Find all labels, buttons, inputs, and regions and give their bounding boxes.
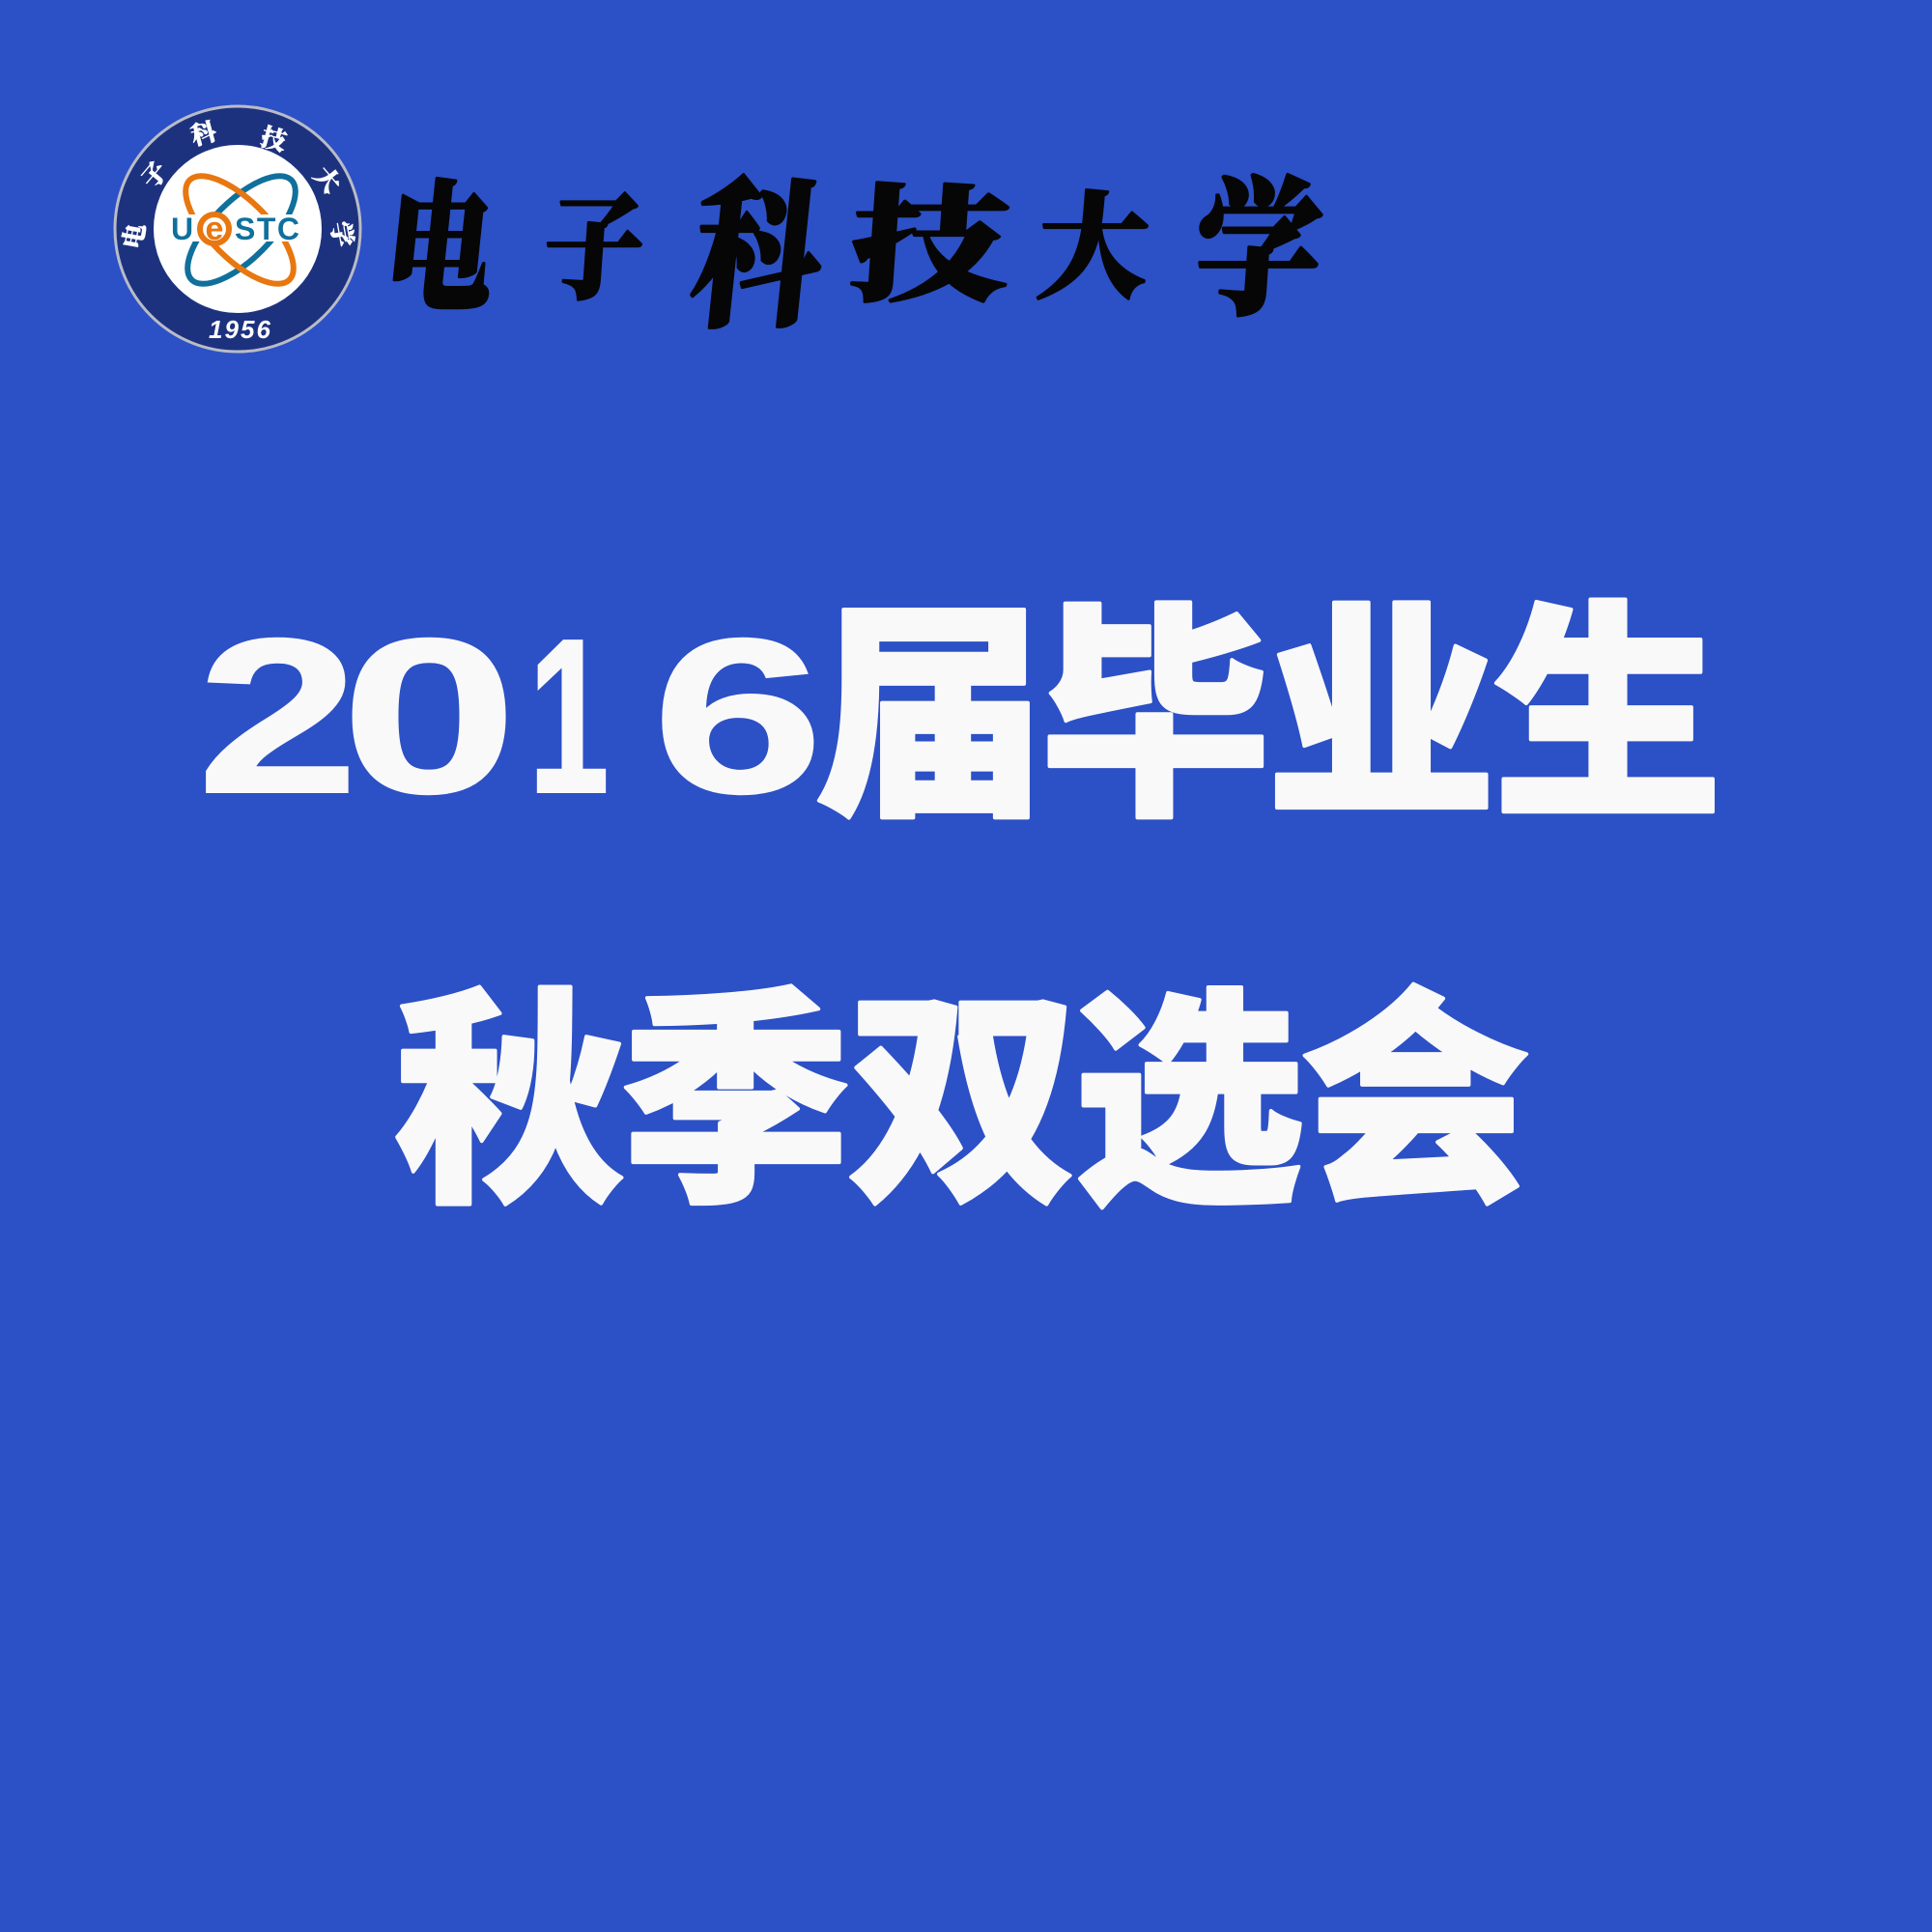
calligraphy university name	[378, 128, 1329, 359]
logo inner white disc	[154, 145, 322, 313]
logo letter e	[200, 211, 229, 247]
year 2016: 0	[341, 592, 518, 838]
year 2016	[197, 592, 824, 839]
logo orange orbit	[169, 159, 310, 300]
heading characters: 生	[1492, 529, 1722, 863]
year 2016: 1	[528, 592, 610, 838]
calligraphy university name: 电	[378, 137, 506, 339]
heading characters	[815, 529, 1722, 863]
title line 1: 2016届毕业生	[197, 529, 1722, 863]
calligraphy university name: 科	[683, 128, 836, 359]
logo ring characters: 电	[113, 220, 153, 251]
heading characters: 业	[1266, 529, 1496, 863]
logo letter U: U	[171, 212, 193, 246]
calligraphy university name: 技	[845, 146, 1015, 327]
logo teal orbit	[171, 159, 312, 300]
logo year: 1956	[209, 315, 271, 344]
title line 2: 秋季双选会	[395, 916, 1530, 1249]
logo ring characters: 学	[324, 218, 363, 249]
calligraphy university name: 子	[539, 157, 651, 323]
logo ring characters: 大	[307, 157, 351, 200]
logo ring characters: 子	[131, 153, 175, 195]
logo: UESTC seal	[113, 106, 363, 352]
logo letters STC: STC	[235, 212, 299, 246]
logo ring characters: 科	[186, 112, 220, 153]
logo letter e: e	[206, 211, 223, 247]
calligraphy university name: 大	[1034, 155, 1155, 322]
title line 2: 秋季双选会: 选	[1074, 916, 1304, 1249]
year 2016: 2	[197, 592, 358, 839]
title line 2: 秋季双选会: 会	[1300, 916, 1530, 1249]
logo letters band	[170, 214, 303, 242]
calligraphy university name: 学	[1189, 130, 1329, 344]
heading characters: 毕	[1040, 529, 1270, 863]
year 2016: 6	[652, 593, 824, 838]
heading characters: 届	[815, 529, 1045, 863]
title line 2: 秋季双选会: 秋	[395, 916, 625, 1249]
logo ring characters	[113, 112, 363, 251]
logo ring characters: 技	[257, 118, 291, 158]
title line 2: 秋季双选会: 双	[848, 916, 1078, 1249]
title line 2: 秋季双选会: 季	[621, 916, 851, 1249]
